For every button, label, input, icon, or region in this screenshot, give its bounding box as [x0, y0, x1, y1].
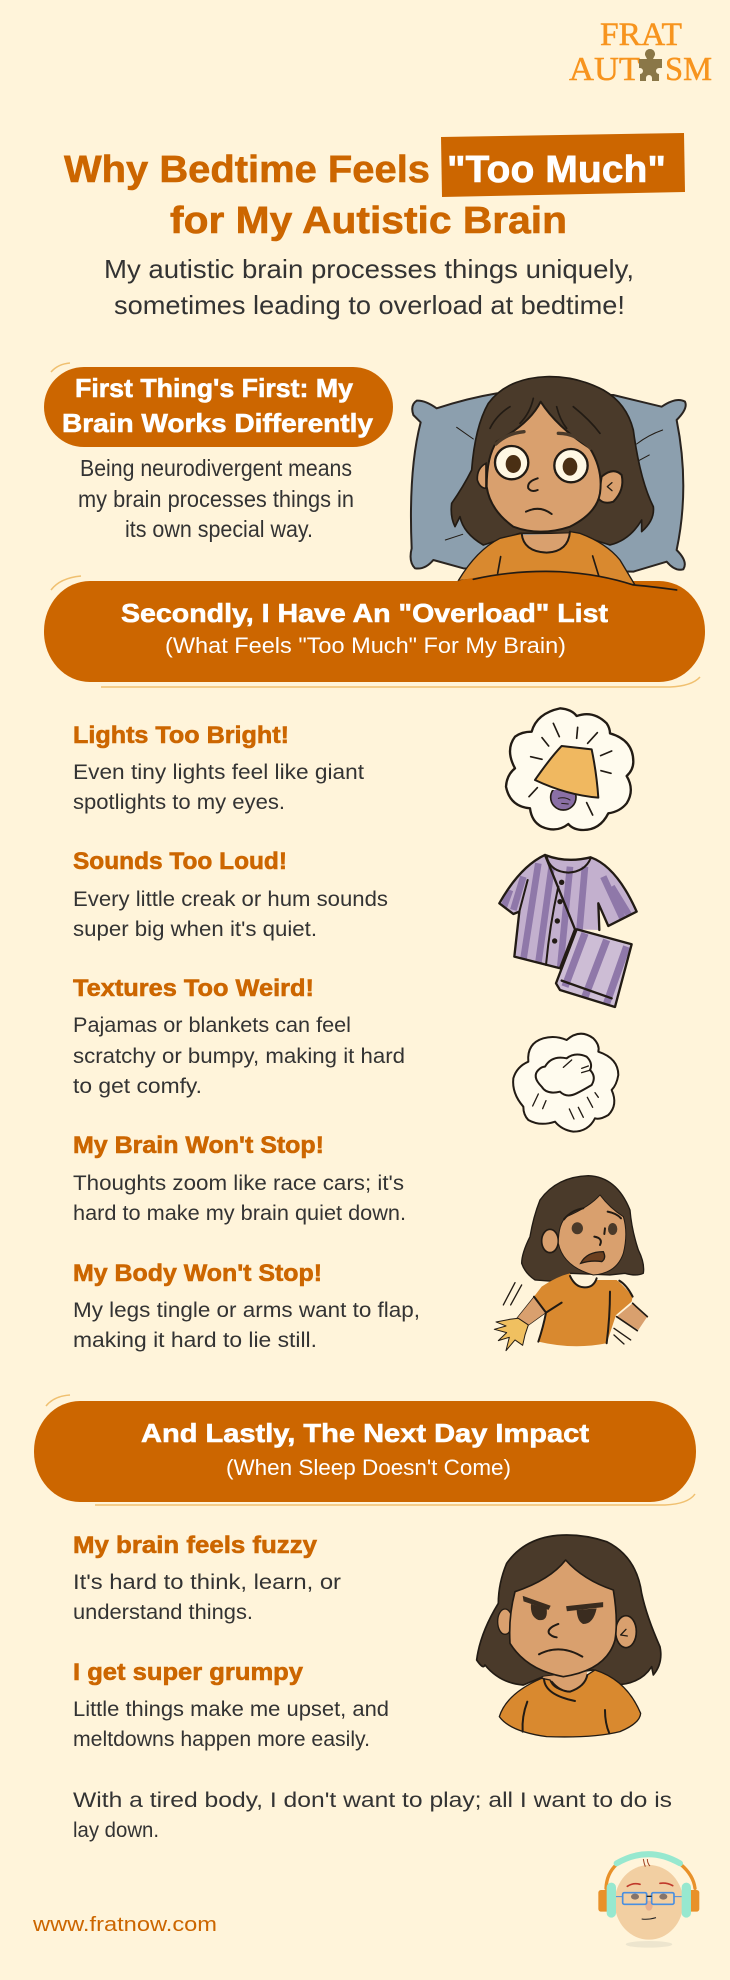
- logo: Frat Autism: AUT: [569, 51, 640, 88]
- list item: body: My legs tingle or arms want to flap,: [73, 1299, 420, 1322]
- list item: brain: My Brain Won't Stop!: [73, 1132, 324, 1159]
- list item: brain: [73, 1132, 406, 1225]
- website url: www.fratnow.com: [32, 1914, 217, 1936]
- list item: lights: Lights Too Bright!: [73, 722, 289, 749]
- list item: lights: spotlights to my eyes.: [73, 791, 285, 814]
- list item: fuzzy brain: My brain feels fuzzy: [73, 1532, 318, 1559]
- list item: grumpy: Little things make me upset, and: [73, 1698, 389, 1721]
- list item: sounds: Sounds Too Loud!: [73, 848, 287, 875]
- list item: body: making it hard to lie still.: [73, 1329, 317, 1352]
- panel: overload list heading: Secondly, I Have An "Overload" List: [121, 598, 608, 628]
- subtitle: sometimes leading to overload at bedtime!: [114, 290, 625, 320]
- list: next day impact items: [73, 1532, 389, 1751]
- logo: Frat Autism: FRAT: [600, 17, 682, 53]
- panel: first thing's first heading: First Thing's First: My: [75, 373, 354, 403]
- text block: neurodivergent explanation: Being neurodivergent means: [80, 455, 352, 481]
- title: [64, 133, 685, 242]
- list item: fuzzy brain: [73, 1532, 341, 1624]
- panel: first thing's first heading: Brain Works Differently: [62, 408, 374, 438]
- list item: brain: hard to make my brain quiet down.: [73, 1202, 406, 1225]
- text block: neurodivergent explanation: my brain processes things in: [78, 486, 354, 512]
- subtitle: [104, 254, 634, 320]
- list item: body: [73, 1260, 420, 1352]
- text block: neurodivergent explanation: [78, 455, 354, 542]
- list item: grumpy: I get super grumpy: [73, 1659, 304, 1686]
- logo: Frat Autism: SM: [665, 51, 712, 88]
- title: Why Bedtime Feels: [64, 149, 430, 191]
- list item: textures: Pajamas or blankets can feel: [73, 1014, 351, 1037]
- icon: bald head avatar with headphones: [598, 1854, 699, 1948]
- list item: lights: [73, 722, 364, 814]
- icon: striped pajamas: [499, 855, 637, 1007]
- text block: neurodivergent explanation: its own special way.: [125, 516, 313, 542]
- list item: sounds: super big when it's quiet.: [73, 918, 317, 941]
- icon: scratchy blanket thought cloud: [513, 1034, 618, 1132]
- list item: sounds: Every little creak or hum sounds: [73, 888, 388, 911]
- panel: overload list heading: (What Feels "Too Much" For My Brain): [165, 633, 566, 658]
- list item: textures: scratchy or bumpy, making it hard: [73, 1045, 405, 1068]
- panel: next day impact heading: And Lastly, The Next Day Impact: [141, 1418, 589, 1448]
- list item: body: My Body Won't Stop!: [73, 1260, 322, 1287]
- title: "Too Much": [447, 149, 666, 191]
- text block: tired body closing: lay down.: [73, 1819, 159, 1842]
- list item: fuzzy brain: It's hard to think, learn, or: [73, 1571, 341, 1594]
- list item: sounds: [73, 848, 388, 941]
- list item: textures: [73, 975, 405, 1098]
- icon: fidgeting girl: [494, 1176, 647, 1351]
- logo: Frat Autism: [569, 17, 712, 88]
- list item: textures: Textures Too Weird!: [73, 975, 314, 1002]
- text block: tired body closing: [73, 1789, 672, 1842]
- panel: overload list heading: [44, 576, 705, 687]
- icon: grumpy girl: [477, 1535, 661, 1737]
- icon: girl awake in bed on a pillow: [411, 377, 686, 591]
- list item: textures: to get comfy.: [73, 1075, 202, 1098]
- list item: fuzzy brain: understand things.: [73, 1601, 253, 1624]
- panel: next day impact heading: [34, 1395, 696, 1505]
- list item: grumpy: [73, 1659, 389, 1751]
- list item: lights: Even tiny lights feel like giant: [73, 761, 364, 784]
- icon: bright lamp in cloud: [506, 708, 633, 830]
- title: for My Autistic Brain: [170, 200, 567, 242]
- list: overload items: [73, 722, 420, 1352]
- list item: brain: Thoughts zoom like race cars; it's: [73, 1172, 404, 1195]
- text block: tired body closing: With a tired body, I don't want to play; all I want to do is: [73, 1789, 672, 1812]
- subtitle: My autistic brain processes things uniquely,: [104, 254, 634, 284]
- list item: grumpy: meltdowns happen more easily.: [73, 1728, 370, 1751]
- panel: next day impact heading: (When Sleep Doesn't Come): [226, 1455, 511, 1480]
- panel: first thing's first heading: [44, 363, 393, 447]
